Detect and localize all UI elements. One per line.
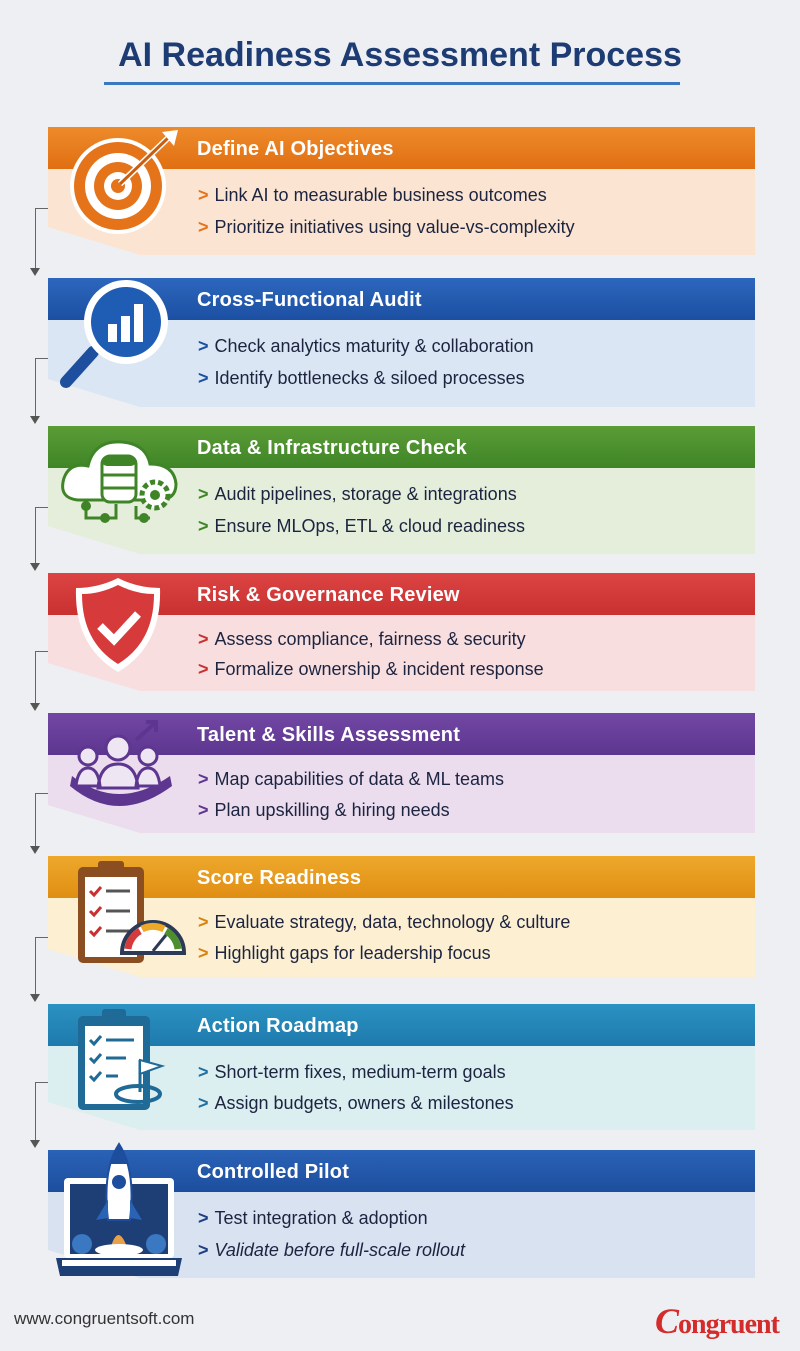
footer: logo: Congruent [655, 1301, 779, 1341]
panel: define AI objectives [48, 127, 755, 255]
panel: score readiness [48, 856, 755, 977]
panel: cross-functional audit: > Check analytics maturity & collaboration [198, 336, 534, 356]
panel: cross-functional audit [48, 278, 755, 407]
title: AI Readiness Assessment Process [118, 36, 682, 74]
panel: action roadmap: Action Roadmap [197, 1015, 359, 1037]
panel: action roadmap: > Assign budgets, owners & milestones [198, 1093, 514, 1113]
panel: data & infrastructure [48, 426, 755, 554]
footer: website: www.congruentsoft.com [14, 1309, 194, 1328]
panel: risk & governance: > Formalize ownership & incident response [198, 659, 544, 679]
panel: cross-functional audit: > Identify bottlenecks & siloed processes [198, 368, 525, 388]
panel: talent & skills: > Map capabilities of data & ML teams [198, 769, 504, 789]
panel: risk & governance: > Assess compliance, fairness & security [198, 629, 526, 649]
panel: data & infrastructure: Data & Infrastructure Check [197, 437, 467, 459]
panel: action roadmap [48, 1004, 755, 1130]
panel: action roadmap: > Short-term fixes, medium-term goals [198, 1062, 506, 1082]
connectors [30, 208, 48, 1148]
panel: talent & skills: Talent & Skills Assessment [197, 724, 460, 746]
panel: define AI objectives: Define AI Objectives [197, 138, 394, 160]
icon: target [70, 130, 178, 234]
icon: cloud database [61, 440, 178, 523]
panel: score readiness: > Highlight gaps for leadership focus [198, 943, 491, 963]
panel: controlled pilot: > Test integration & adoption [198, 1208, 428, 1228]
panel: define AI objectives: > Prioritize initiatives using value-vs-complexity [198, 217, 575, 237]
icon: magnifier chart [60, 280, 168, 388]
panel: score readiness: > Evaluate strategy, data, technology & culture [198, 912, 570, 932]
icon: clipboard gauge [78, 861, 186, 963]
panel: talent & skills [48, 713, 755, 833]
panel: data & infrastructure: > Ensure MLOps, ETL & cloud readiness [198, 516, 525, 536]
panel: controlled pilot [48, 1150, 755, 1278]
panel: controlled pilot: > Validate before full-scale rollout [198, 1240, 465, 1260]
panel: data & infrastructure: > Audit pipelines, storage & integrations [198, 484, 517, 504]
panel: define AI objectives: > Link AI to measurable business outcomes [198, 185, 547, 205]
icon: rocket laptop [56, 1142, 182, 1276]
panel: controlled pilot: Controlled Pilot [197, 1161, 349, 1183]
panel: risk & governance: Risk & Governance Review [197, 584, 460, 606]
panel: score readiness: Score Readiness [197, 867, 361, 889]
icon: shield [76, 578, 160, 672]
panel: talent & skills: > Plan upskilling & hiring needs [198, 800, 450, 820]
icon: team [70, 720, 172, 806]
icon: roadmap clipboard [78, 1009, 166, 1110]
panel: cross-functional audit: Cross-Functional Audit [197, 289, 422, 311]
panel: risk & governance [48, 573, 755, 691]
